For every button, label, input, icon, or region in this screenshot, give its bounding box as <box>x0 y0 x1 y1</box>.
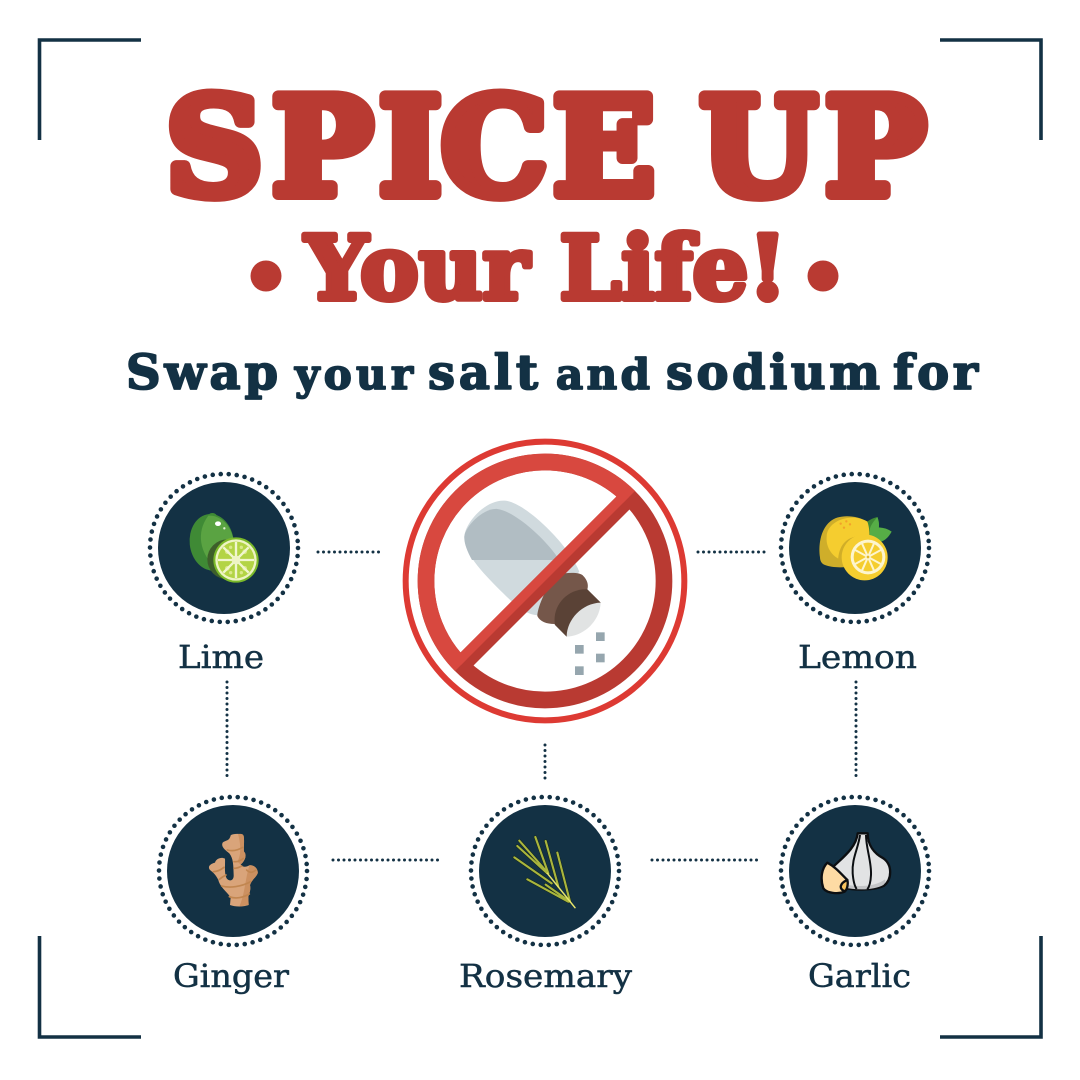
panel: ginger <box>159 797 307 945</box>
label: Lemon: Lemon <box>798 638 917 676</box>
icon: lemon <box>819 516 892 580</box>
label: Rosemary: Rosemary <box>459 957 632 995</box>
panel: rosemary <box>471 797 619 945</box>
subtitle: and <box>556 350 650 399</box>
subtitle: for <box>893 345 979 401</box>
subtitle <box>126 345 979 401</box>
subtitle: sodium <box>666 345 880 401</box>
panel: garlic <box>781 797 929 945</box>
label: Ginger: Ginger <box>173 957 290 995</box>
subtitle: your <box>294 350 414 399</box>
label: Garlic: Garlic <box>808 957 911 995</box>
icon: rosemary <box>514 837 575 908</box>
subtitle: salt <box>428 345 538 401</box>
icon: ginger <box>209 834 258 907</box>
icon: garlic <box>822 833 890 893</box>
panel: lemon <box>781 474 929 622</box>
label: Lime: Lime <box>178 638 264 676</box>
panel: lime <box>150 474 298 622</box>
subtitle: Swap <box>126 345 278 401</box>
prohibition ring and slash, light half <box>418 454 635 671</box>
prohibition ring and slash, dark half <box>426 462 664 700</box>
salt shaker <box>464 501 605 675</box>
title: SPICE UP: SPICE UP <box>166 68 926 226</box>
icon: lime <box>187 512 259 583</box>
title: Your Life with bullet dots: Your Life! <box>304 216 787 320</box>
icon: no salt sign <box>406 442 684 720</box>
